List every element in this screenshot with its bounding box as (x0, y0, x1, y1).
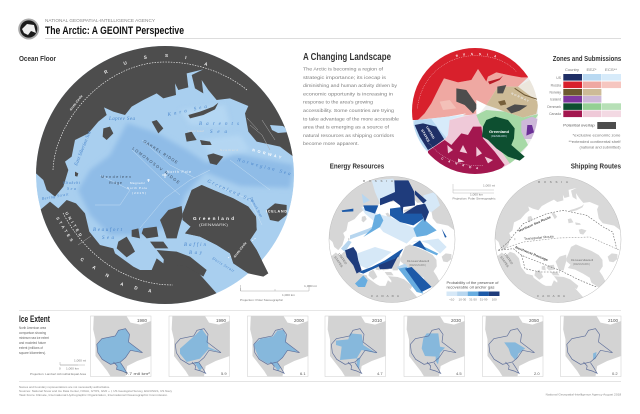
text block: landscape intro: accessibility. Some countries are trying (303, 108, 394, 114)
map: zones: STATES (420, 128, 431, 143)
map labels: North Pole (167, 170, 191, 174)
norway zone (486, 87, 539, 118)
map labels: Laptev Sea (108, 117, 136, 122)
heading: zones: Zones and Submissions (553, 54, 621, 63)
map labels: Norwegian Sea (236, 158, 291, 177)
thumb: 2030 (404, 316, 465, 376)
footnotes: *exclusive economic zone (572, 134, 621, 138)
footnotes (568, 134, 621, 150)
energy map labels (333, 179, 429, 298)
russia eez (418, 69, 528, 120)
scale bar: ocean floor (240, 284, 317, 302)
scale bar: ice extent (30, 358, 86, 376)
thumb: 2100: 0.2 (612, 371, 618, 376)
footer: sources: Names and boundary representations are not necessarily authoritative. (19, 385, 110, 389)
map labels: RUSSIA (103, 53, 209, 75)
heading: energy resources: Energy Resources (330, 161, 384, 170)
energy map labels: (DENMARK) (409, 263, 426, 267)
energy map labels: Greenland (407, 259, 429, 263)
map: zones: Greenland (489, 130, 509, 134)
map labels: CANADA (79, 257, 153, 294)
scale bar: ocean floor: 1,000 km (282, 293, 296, 297)
energy map labels: STATES (333, 255, 344, 268)
text block: ice extent: comparison showing (19, 331, 46, 335)
scale bar: ice extent: Projection: Lambert Azimuthal Equal Area (30, 372, 86, 376)
text block: landscape intro: area that is emerging as a source of (303, 125, 390, 131)
map: zones: CANADA (441, 156, 479, 170)
title: The Arctic: A GEOINT Perspective (45, 25, 184, 37)
scale bar: energy (452, 184, 496, 200)
thumb: 2100 (560, 316, 621, 376)
text block: ice extent: North American area (19, 326, 46, 330)
text block: landscape intro: to take advantage of the more accessible (303, 116, 399, 122)
table columns: Norway (550, 90, 561, 94)
text block: ice extent: extent (millions of (19, 346, 43, 350)
map labels: Barents (199, 122, 239, 127)
russia land (408, 45, 528, 120)
map labels: Baffin (184, 243, 206, 248)
heading: shipping routes: Shipping Routes (571, 161, 621, 170)
text block: ice extent: and modeled future (19, 341, 46, 345)
thumb: 2000: 6.1 (300, 371, 306, 376)
footnotes: (national and submitted) (580, 146, 620, 150)
footer: credit: National Geospatial-Intelligence Agency August 2018 (546, 392, 622, 396)
footer: sources (19, 385, 173, 397)
scale bar: energy: 1,000 mi (483, 184, 495, 188)
thumb: 2010: 2010 (372, 318, 383, 323)
text block: landscape intro: become more apparent. (303, 141, 359, 147)
thumb: 2030: 4.5 (456, 371, 462, 376)
map: shipping routes: (DENMARK) (573, 262, 590, 266)
map: shipping routes: Northwest Passage (515, 245, 549, 262)
map labels: Mendeleev (101, 175, 131, 179)
table columns: EEZ* (586, 68, 597, 72)
map labels: (DENMARK) (199, 222, 229, 227)
scale bar: ice extent: 1,000 km (66, 366, 80, 370)
thumb: 2010: 4.7 (377, 371, 383, 376)
potential overlap key: Potential overlap (563, 124, 595, 128)
legend: energy probability: <10 (449, 298, 455, 302)
thumb: 1980: 1980 (137, 318, 148, 323)
map labels: Ridge (109, 181, 122, 185)
text block: landscape intro: diminishing and human activity driven by (303, 83, 398, 89)
thumb: 1990: 1990 (216, 318, 227, 323)
map: shipping routes: Northern Sea Route (518, 215, 552, 233)
legend: energy probability: 100 (492, 298, 497, 302)
legend: energy probability (446, 281, 500, 302)
text block: landscape intro: strategic importance; its icecap is (303, 75, 387, 81)
map labels: Greenland Sea (206, 179, 254, 204)
thumb: 2050 (482, 316, 543, 376)
map: zones: (DENMARK) (491, 134, 507, 138)
map labels: (2015) (132, 191, 146, 195)
energy map labels: UNITED (337, 252, 348, 266)
map labels: LOMONOSOV RIDGE (131, 146, 181, 185)
map: ocean floor (36, 46, 294, 304)
legend: energy probability: Probability of the presence of (446, 281, 499, 285)
map labels: Greenland (193, 216, 234, 221)
legend: energy probability: 51-99 (480, 298, 488, 302)
text block: ice extent (19, 326, 49, 355)
map: zones: NORWAY (511, 91, 530, 103)
map labels: Bay (189, 251, 203, 256)
map labels: ICELAND (266, 210, 287, 214)
map labels: UNITED (64, 211, 83, 237)
table columns: Russia (551, 84, 561, 88)
map: shipping routes (494, 176, 622, 303)
map labels: Sea (67, 186, 76, 191)
scale bar: ocean floor: Projection: Polar Stereographic (240, 298, 284, 302)
map labels: Franz Josef (188, 129, 204, 133)
map labels: Chukchi (63, 180, 80, 185)
map labels: East Siberian Sea (74, 130, 93, 168)
map: shipping routes: RUSSIA (538, 180, 569, 184)
legend: energy probability: recoverable oil and/or gas (446, 286, 495, 290)
table columns (547, 68, 618, 116)
text block: landscape intro: economic opportunity is increasing in (303, 91, 393, 97)
text block: landscape intro: natural resources as shipping corridors (303, 133, 395, 139)
thumb: 2050: 2050 (529, 318, 540, 323)
map: zones: RUSSIA (455, 52, 498, 59)
thumb: 2050: 2.0 (534, 371, 540, 376)
overlaps (456, 85, 527, 113)
map: energy (328, 176, 456, 303)
panel: zones and submissions (547, 54, 621, 150)
table swatches (563, 74, 621, 117)
heading: a changing landscape: A Changing Landscape (303, 52, 391, 63)
map labels: Magnetic (130, 181, 146, 185)
scale bar: energy: 1,000 km (470, 192, 484, 196)
thumb: 2030: 2030 (451, 318, 462, 323)
us zone (408, 114, 466, 152)
map labels: NORWAY (252, 148, 282, 160)
map labels: Davis Strait (211, 255, 236, 274)
heading: ice extent: Ice Extent (19, 314, 50, 324)
footer: sources: Sources: National Snow and Ice Data Center, NOAA, GTOS, GMJ + I, US Geological Survey, EIA/USGS, US Navy (19, 389, 173, 393)
text block: landscape intro (303, 66, 399, 147)
table columns: Denmark (547, 105, 561, 109)
thumb: 1980 (90, 316, 151, 376)
text block: landscape intro: response to the area's growing (303, 100, 373, 106)
agency name: NATIONAL GEOSPATIAL-INTELLIGENCE AGENCY (45, 18, 155, 23)
text block: ice extent: minimum sea ice extent (19, 336, 49, 340)
icon: agency seal (18, 18, 39, 40)
table columns: US (556, 76, 562, 80)
map labels: GAKKEL RIDGE (142, 139, 179, 165)
scale bar: ice extent: 0 (59, 366, 61, 370)
map labels: Arctic Circle (69, 94, 84, 112)
map labels: Sea (102, 236, 114, 241)
legend: energy probability: 10-30 (459, 298, 467, 302)
map labels: Svalbard (220, 148, 238, 152)
scale bar: ocean floor: 1,000 mi (304, 284, 317, 288)
thumb: 2100: 2100 (608, 318, 619, 323)
table columns: Country (565, 68, 579, 72)
thumb: 2000 (248, 316, 308, 376)
energy map labels: CANADA (371, 294, 400, 298)
table columns: Canada (549, 112, 561, 116)
thumb: 1980: 7.7 mil km² (125, 371, 151, 376)
greenland (482, 117, 525, 161)
map labels: Kara Sea (166, 105, 208, 118)
denmark zone (476, 110, 539, 166)
table columns: ECS** (605, 68, 618, 72)
energy map labels: RUSSIA (363, 179, 394, 183)
map: shipping routes: STATES (499, 255, 510, 268)
map: shipping routes: UNITED (503, 252, 514, 266)
legend: energy probability: 31-50 (469, 298, 477, 302)
heading: ocean floor: Ocean Floor (19, 54, 56, 63)
header (18, 18, 184, 40)
map: shipping routes: CANADA (537, 294, 566, 298)
map labels: STATES (55, 216, 74, 243)
map labels: Bering Strait (41, 191, 70, 201)
canada zone (428, 113, 513, 178)
map labels: Denmark Strait (249, 196, 263, 219)
footer: sources: Task Force Climate, International Hydrographic Organization, International Oceanographic Commission. (19, 393, 168, 397)
map labels: Arctic Circle (233, 241, 248, 259)
map: shipping routes: Transpolar Route (524, 234, 554, 241)
thumb: 1990: 5.9 (221, 371, 227, 376)
map labels: North Pole (127, 186, 147, 190)
footnotes: **extended continental shelf (568, 140, 621, 144)
thumb: 2000: 2000 (294, 318, 305, 323)
greenland overhang (183, 185, 268, 277)
map: zones: UNITED (425, 126, 436, 141)
text block: ice extent: square kilometers). (19, 351, 46, 355)
scale bar: ice extent: 1,000 mi (74, 358, 86, 362)
map: zones (412, 48, 538, 174)
map: shipping routes: Greenland (571, 258, 593, 262)
thumb: 1990 (169, 316, 230, 376)
table columns: Iceland (550, 98, 561, 102)
map labels: Sea (210, 130, 228, 135)
map labels: Beaufort (93, 228, 123, 233)
map labels (41, 53, 291, 294)
thumb: 2010 (325, 316, 386, 376)
text block: landscape intro: The Arctic is becoming a region of (303, 66, 384, 72)
scale bar: energy: Projection: Polar Stereographic (452, 196, 496, 200)
